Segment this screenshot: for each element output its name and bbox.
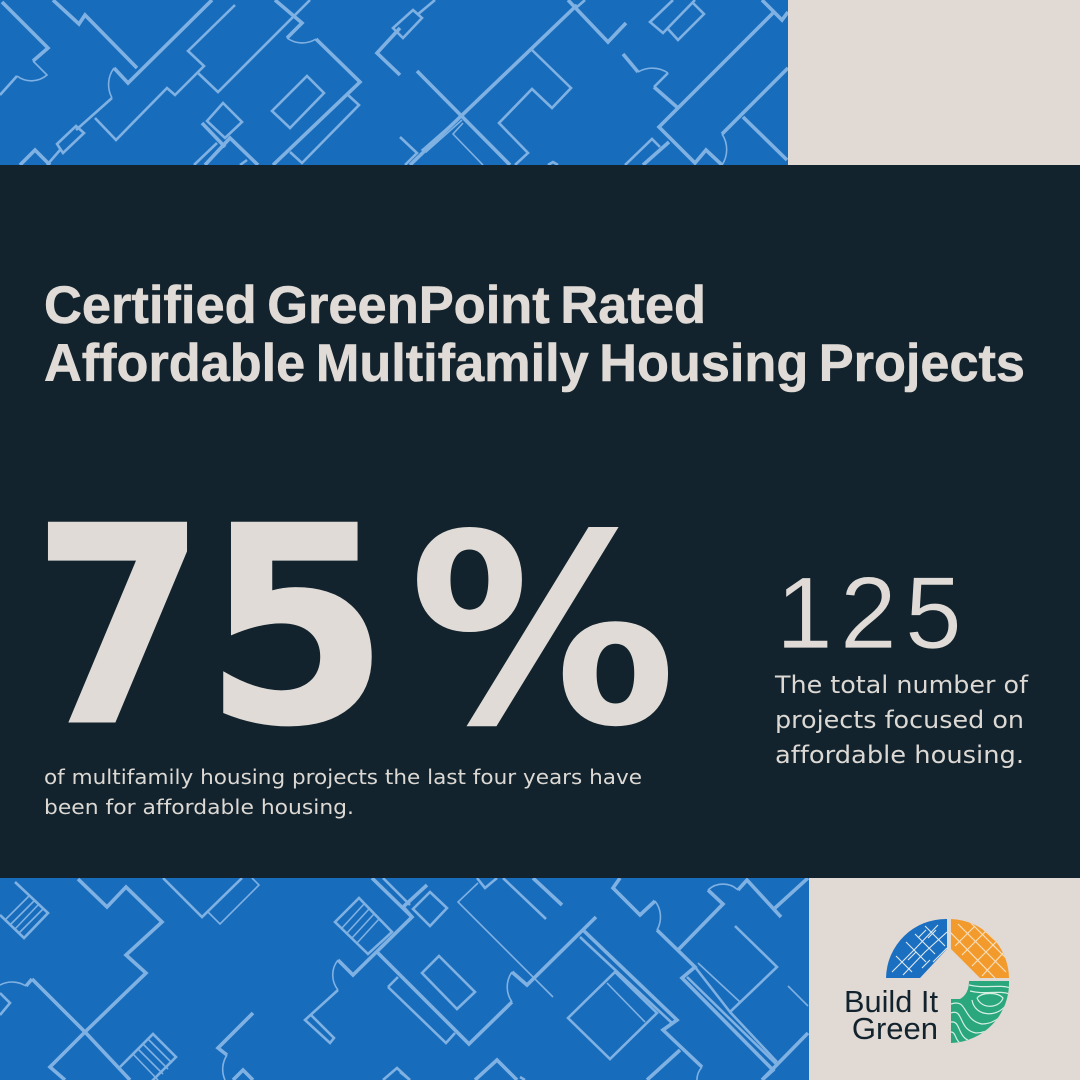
stat description: been for affordable housing. [44,795,354,819]
heading [44,276,1025,393]
big stat: 75%: 7 [32,468,207,787]
panel: bottom blueprint band [0,878,809,1080]
icon: staircase top left [0,882,48,938]
logo wordmark [844,984,938,1046]
secondary stat: 125: 125 [776,556,962,670]
stat description: of multifamily housing projects the last four years have [44,765,642,789]
secondary stat description: affordable housing. [775,741,1024,769]
panel: bottom right beige block [809,878,1080,1080]
logo: Build It Green [844,915,1013,1046]
secondary stat description [774,671,1029,769]
logo quadrant: green topography [951,981,1010,1043]
big stat: 75%: % [409,479,676,784]
icon: staircase right [335,898,392,954]
dark background panel [0,165,1080,878]
icon: staircase bottom [120,1034,176,1080]
panel: top right beige block [788,0,1080,165]
heading: Certified GreenPoint Rated [44,276,706,335]
big stat: 75%: 5 [203,468,390,787]
logo quadrant: blue floor plan [886,919,947,978]
panel: top blueprint band [0,0,788,165]
secondary stat description: The total number of [774,671,1029,699]
stat description [44,765,642,819]
heading: Affordable Multifamily Housing Projects [44,334,1025,393]
big stat: 75% [32,468,676,787]
secondary stat description: projects focused on [775,706,1024,734]
logo wordmark: Build It [844,984,938,1019]
logo quadrant: orange street grid [951,919,1009,978]
logo wordmark: Green [852,1011,938,1046]
